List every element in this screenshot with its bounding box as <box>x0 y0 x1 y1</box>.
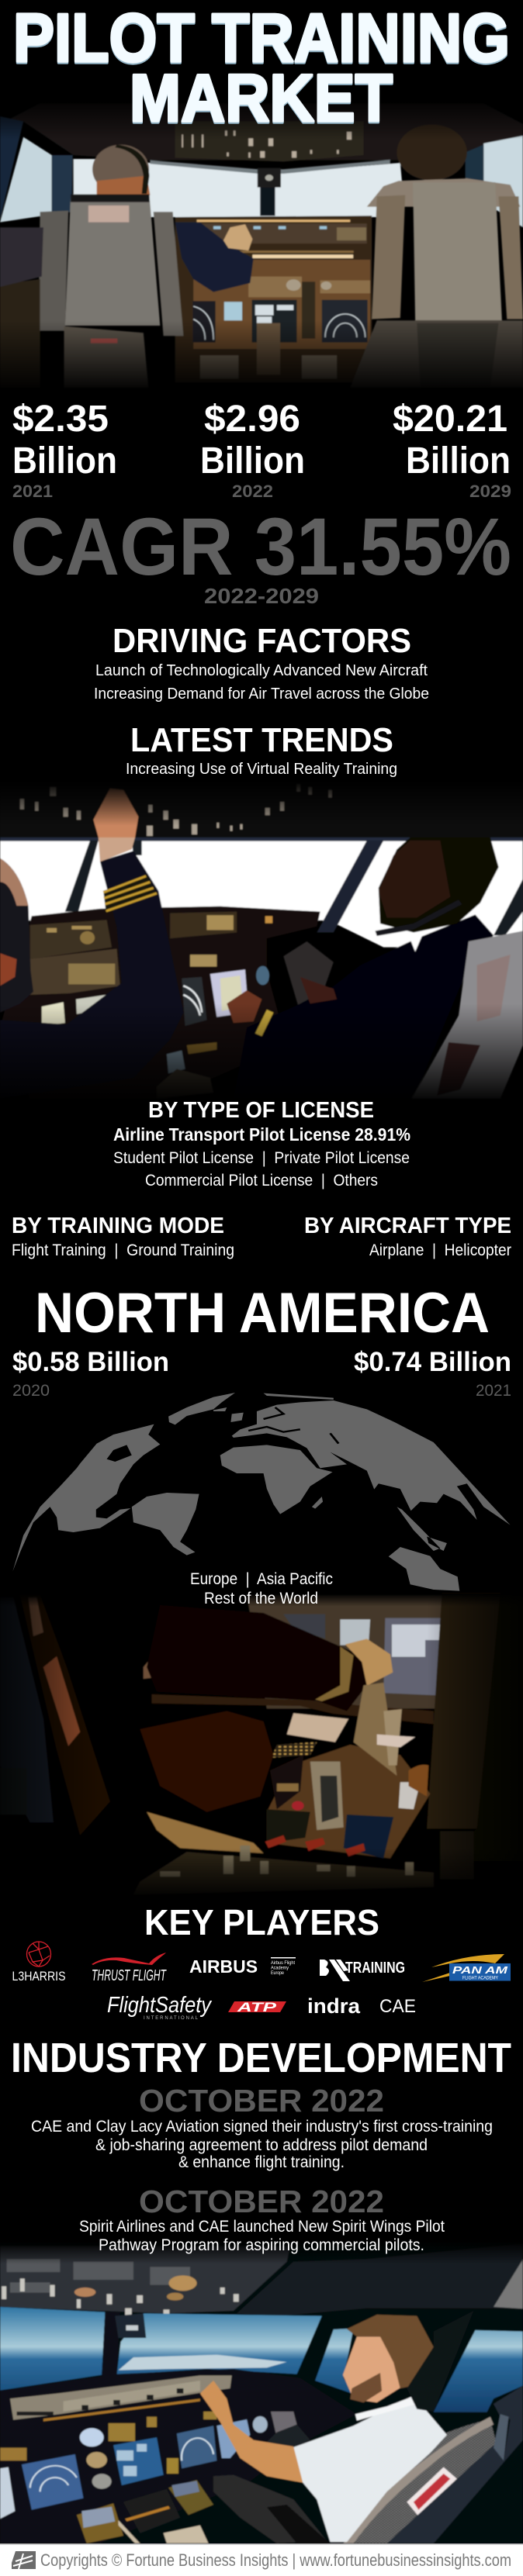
stat: 2029: 2029 <box>469 482 511 501</box>
title: MARKET <box>130 61 393 136</box>
development item 1 <box>31 2083 493 2171</box>
logo: Airbus Flight Academy <box>189 1956 296 1977</box>
latest trends: Increasing Use of Virtual Reality Training <box>126 761 397 778</box>
latest trends: LATEST TRENDS <box>130 721 393 759</box>
logo: Airbus Flight Academy: AIRBUS <box>189 1956 258 1977</box>
driving factors: Launch of Technologically Advanced New Aircraft <box>95 662 428 679</box>
stat: 2022: 2022 <box>232 482 273 501</box>
photo: two pilots in bright cockpit <box>0 781 523 1104</box>
segment: by aircraft type: Airplane | Helicopter <box>369 1241 511 1259</box>
CAGR figure: 2022-2029 <box>204 584 319 608</box>
region value 2020: $0.58 Billion <box>12 1347 169 1377</box>
logo: L3Harris <box>12 1942 65 1984</box>
key players heading: KEY PLAYERS <box>144 1902 379 1942</box>
region value 2020: 2020 <box>12 1382 50 1400</box>
Greenland and arctic <box>168 1393 334 1424</box>
stat: 2029 <box>393 399 511 501</box>
title <box>13 0 510 136</box>
latest trends <box>126 721 397 778</box>
development item 2: OCTOBER 2022 <box>139 2184 384 2219</box>
footer logo <box>12 2551 36 2569</box>
logo: Thrust Flight: THRUST FLIGHT <box>92 1967 167 1984</box>
logo: Indra: indra <box>307 1994 361 2018</box>
segment: by type of license <box>113 1098 410 1190</box>
segment: by training mode: BY TRAINING MODE <box>12 1214 224 1238</box>
segment: by type of license: Student Pilot License | Private Pilot License <box>113 1149 410 1167</box>
development item 1: OCTOBER 2022 <box>139 2083 384 2118</box>
Africa <box>220 1445 333 1514</box>
development item 2 <box>79 2184 445 2254</box>
logo: ATP: ATP <box>236 2000 277 2015</box>
stat: 2022 <box>200 399 305 501</box>
development item 2: Spirit Airlines and CAE launched New Spirit Wings Pilot <box>79 2218 445 2236</box>
North America <box>12 1424 160 1572</box>
region value 2021: $0.74 Billion <box>354 1347 511 1377</box>
driving factors <box>94 622 429 703</box>
stat: 2021: Billion <box>12 440 117 482</box>
segment: by type of license: Airline Transport Pilot License 28.91% <box>113 1124 410 1145</box>
development item 2: Pathway Program for aspiring commercial pilots. <box>99 2236 424 2254</box>
market size figures <box>12 399 511 501</box>
footer bar <box>0 2543 523 2576</box>
segment: by type of license: Commercial Pilot License | Others <box>145 1172 378 1190</box>
logo: FlightSafety: INTERNATIONAL <box>144 2016 199 2021</box>
South America <box>132 1493 199 1556</box>
segment: by aircraft type: BY AIRCRAFT TYPE <box>304 1214 511 1238</box>
logo: Airbus Flight Academy: Academy <box>271 1965 289 1971</box>
driving factors: DRIVING FACTORS <box>113 622 411 660</box>
logo: Pan Am Flight Academy: FLIGHT ACADEMY <box>462 1976 499 1980</box>
South-East Asia islands <box>397 1507 447 1551</box>
stat: 2029: $20.21 <box>393 399 507 440</box>
stat: 2022: $2.96 <box>204 399 300 440</box>
segment: by type of license: BY TYPE OF LICENSE <box>148 1098 374 1123</box>
logo: Pan Am Flight Academy <box>422 1954 511 1982</box>
other regions: Europe | Asia Pacific <box>190 1570 333 1588</box>
logo: Pan Am Flight Academy: PAN AM <box>452 1964 509 1976</box>
photo: pilot in white shirt at controls <box>0 2241 523 2543</box>
region value 2021 <box>354 1347 511 1400</box>
logo: Thrust Flight <box>92 1953 167 1984</box>
logo: Airbus Flight Academy: Europe <box>271 1970 284 1976</box>
other regions: Rest of the World <box>204 1590 318 1607</box>
logo: BAA Training <box>320 1960 405 1981</box>
Eurasia <box>230 1400 511 1525</box>
other regions <box>190 1570 333 1607</box>
region heading: NORTH AMERICA <box>35 1282 490 1345</box>
logo: BAA Training: TRAINING <box>345 1960 405 1977</box>
world map globe <box>12 1393 511 1591</box>
key player logos <box>12 1942 511 2021</box>
photo: cockpit seen from behind two pilots <box>0 95 523 393</box>
stat: 2029: Billion <box>406 440 511 482</box>
stat: 2021: 2021 <box>12 482 53 501</box>
segment: by aircraft type <box>304 1214 511 1259</box>
stat: 2022: Billion <box>200 440 305 482</box>
development item 1: & enhance flight training. <box>178 2153 345 2171</box>
logo: Airbus Flight Academy: Airbus Flight <box>271 1960 295 1966</box>
logo: CAE: CAE <box>379 1996 416 2017</box>
logo: ATP <box>228 2000 286 2015</box>
development item 1: CAE and Clay Lacy Aviation signed their industry's first cross-training <box>31 2118 493 2136</box>
photo: pilot hand on throttle <box>0 1594 523 1900</box>
stat: 2021: $2.35 <box>12 399 109 440</box>
region value 2021: 2021 <box>476 1382 511 1400</box>
stat: 2021 <box>12 399 117 501</box>
segment: by training mode: Flight Training | Ground Training <box>12 1241 234 1259</box>
driving factors: Increasing Demand for Air Travel across the Globe <box>94 685 429 703</box>
logo: FlightSafety: FlightSafety <box>107 1993 212 2018</box>
Australia <box>389 1547 459 1591</box>
segment: by training mode <box>12 1214 234 1259</box>
logo: L3Harris: L3HARRIS <box>12 1969 65 1984</box>
development item 1: & job-sharing agreement to address pilot demand <box>95 2136 428 2154</box>
region value 2020 <box>12 1347 169 1400</box>
